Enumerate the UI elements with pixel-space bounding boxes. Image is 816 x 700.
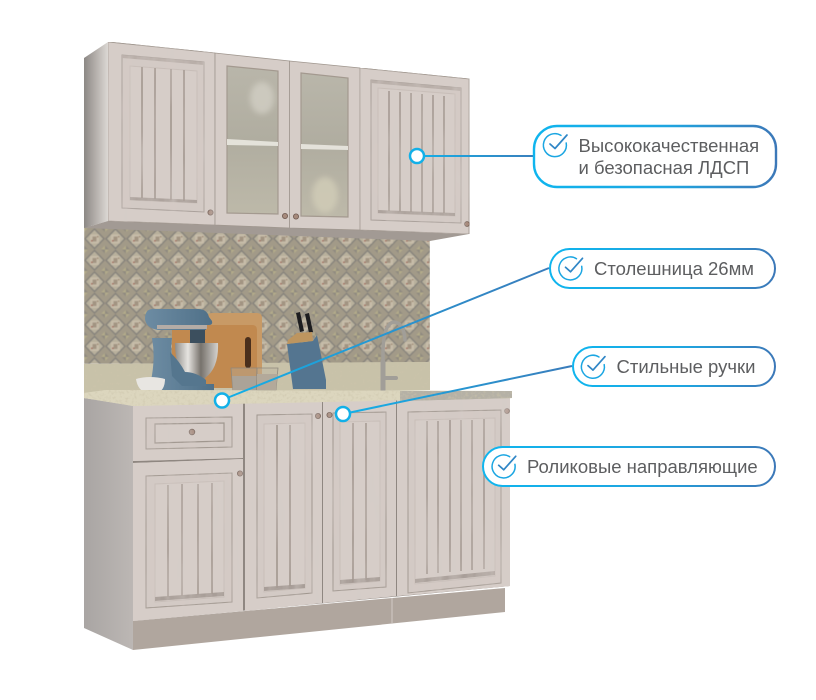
- connector line: [417, 155, 533, 157]
- glass bowls: [231, 368, 278, 392]
- stand mixer: [136, 309, 218, 395]
- callout box: [483, 447, 775, 486]
- lower cabinet: [84, 398, 510, 650]
- drawer: [133, 403, 243, 461]
- door: lower middle right: [323, 400, 396, 603]
- door: glass right: [290, 61, 360, 230]
- check icon: [559, 257, 582, 280]
- door: lower left: [133, 459, 243, 621]
- kitchen accessories: [136, 309, 405, 395]
- cabinet carcass: [133, 398, 510, 621]
- connector line: [222, 268, 549, 400]
- callout box: [573, 347, 775, 386]
- door: glass left: [215, 53, 290, 228]
- marker dot: [336, 407, 350, 421]
- backsplash: [84, 226, 430, 394]
- cutting boards: [172, 313, 262, 388]
- callout text: Роликовые направляющие: [527, 456, 758, 477]
- callout: направляющие: [483, 447, 775, 486]
- callout: ЛДСП: [410, 126, 776, 187]
- knife block: [287, 312, 326, 389]
- upper cabinet: [84, 42, 469, 241]
- callout text line 2: и безопасная ЛДСП: [578, 157, 749, 178]
- callout: ручки: [336, 347, 775, 421]
- door: upper right: [360, 68, 469, 234]
- check icon: [492, 455, 516, 478]
- cabinet side: [84, 42, 108, 228]
- callout text: Высококачественная: [578, 135, 759, 156]
- cabinet side: [84, 398, 133, 650]
- stone upstand: [84, 362, 430, 394]
- check icon: [581, 355, 605, 378]
- marker dot: [410, 149, 424, 163]
- callout text: Столешница 26мм: [594, 258, 754, 279]
- door: upper left: [108, 42, 215, 225]
- cabinet underside: [84, 221, 469, 241]
- faucet: [383, 322, 405, 390]
- callout text: Стильные ручки: [616, 356, 755, 377]
- countertop: [84, 390, 512, 406]
- plinth: [133, 588, 505, 650]
- marker dot: [215, 394, 229, 408]
- door: lower middle left: [245, 402, 322, 611]
- connector line: [343, 366, 572, 414]
- check icon: [543, 134, 567, 157]
- callout box: [550, 249, 775, 288]
- callout box: [534, 126, 776, 187]
- callout: столешница: [215, 249, 775, 408]
- door: lower right: [397, 398, 510, 596]
